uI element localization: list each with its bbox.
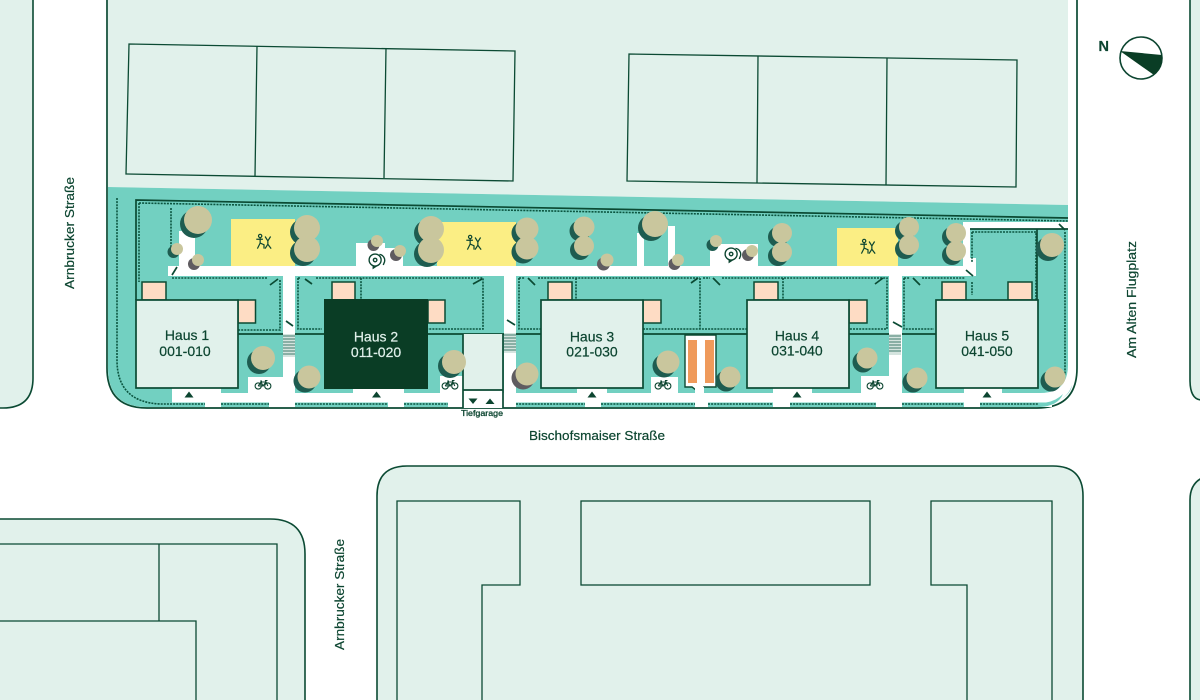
house 3: 021-030 <box>566 344 618 360</box>
trees <box>168 206 1066 392</box>
white footpaths <box>168 222 1068 407</box>
house 3: Haus 3 <box>570 328 614 344</box>
icon: bike 1 <box>255 380 271 389</box>
icon: play figures 3 <box>860 239 875 254</box>
waste enclosure orange <box>685 335 716 395</box>
street label: Am Alten Flugplatz: Am Alten Flugplatz <box>1124 241 1139 358</box>
stairs 2 <box>504 333 516 353</box>
icon: play figures 2 <box>466 235 481 250</box>
house 3 <box>541 300 643 388</box>
neighbouring land north of the site <box>108 0 1068 205</box>
house 4: 031-040 <box>771 342 823 358</box>
house 2 highlighted <box>324 299 428 389</box>
balconies <box>142 282 1032 323</box>
house 5: Haus 5 <box>965 328 1009 344</box>
house 4 <box>747 300 849 388</box>
compass <box>1098 37 1162 79</box>
house 4: Haus 4 <box>775 328 819 344</box>
icon: bike 3 <box>655 380 671 389</box>
house 2 highlighted: Haus 2 <box>354 328 398 344</box>
gate marks <box>172 224 1065 327</box>
street label: Arnbrucker Straße south: Arnbrucker Straße <box>332 539 347 650</box>
bottom green strips <box>172 394 1063 407</box>
icon: bike 2 <box>442 380 458 389</box>
block: bottom right neighbour <box>1190 478 1200 700</box>
house 5 <box>936 300 1038 388</box>
site outline <box>107 0 1077 408</box>
icon: bike 4 <box>867 380 883 389</box>
street label: Arnbrucker Straße north: Arnbrucker Straße <box>62 177 77 289</box>
yellow play area 1 <box>231 219 295 266</box>
compass: N <box>1098 39 1109 55</box>
site green area <box>108 187 1072 407</box>
stairs 3 <box>889 334 901 355</box>
entrance markers <box>184 392 992 398</box>
icon: meeting point 2 <box>725 248 741 262</box>
north buildings west <box>126 44 515 181</box>
block: top left neighbour <box>0 0 33 408</box>
block: bottom left neighbour <box>0 519 305 700</box>
icon: meeting point 1 <box>369 254 385 268</box>
house 1: 001-010 <box>159 343 211 359</box>
house 5: 041-050 <box>961 343 1013 359</box>
yellow play area 3 <box>837 228 898 266</box>
block: top right neighbour <box>1190 0 1200 400</box>
north buildings east <box>627 54 1017 187</box>
underground garage <box>463 334 503 408</box>
stairs 1 <box>283 334 295 357</box>
house 1: Haus 1 <box>165 327 209 343</box>
icon: play figures 1 <box>256 234 271 249</box>
yellow play area 2 <box>437 222 516 266</box>
house 2 highlighted: 011-020 <box>351 344 401 360</box>
garage label: Tiefgarage <box>461 408 503 418</box>
street label: Bischofsmaiser Straße: Bischofsmaiser Straße <box>529 428 665 443</box>
hedge dashed lines <box>117 198 1068 404</box>
garden boundary lines <box>136 200 1068 334</box>
house 1 <box>136 300 238 388</box>
block: bottom centre neighbour <box>377 466 1083 700</box>
